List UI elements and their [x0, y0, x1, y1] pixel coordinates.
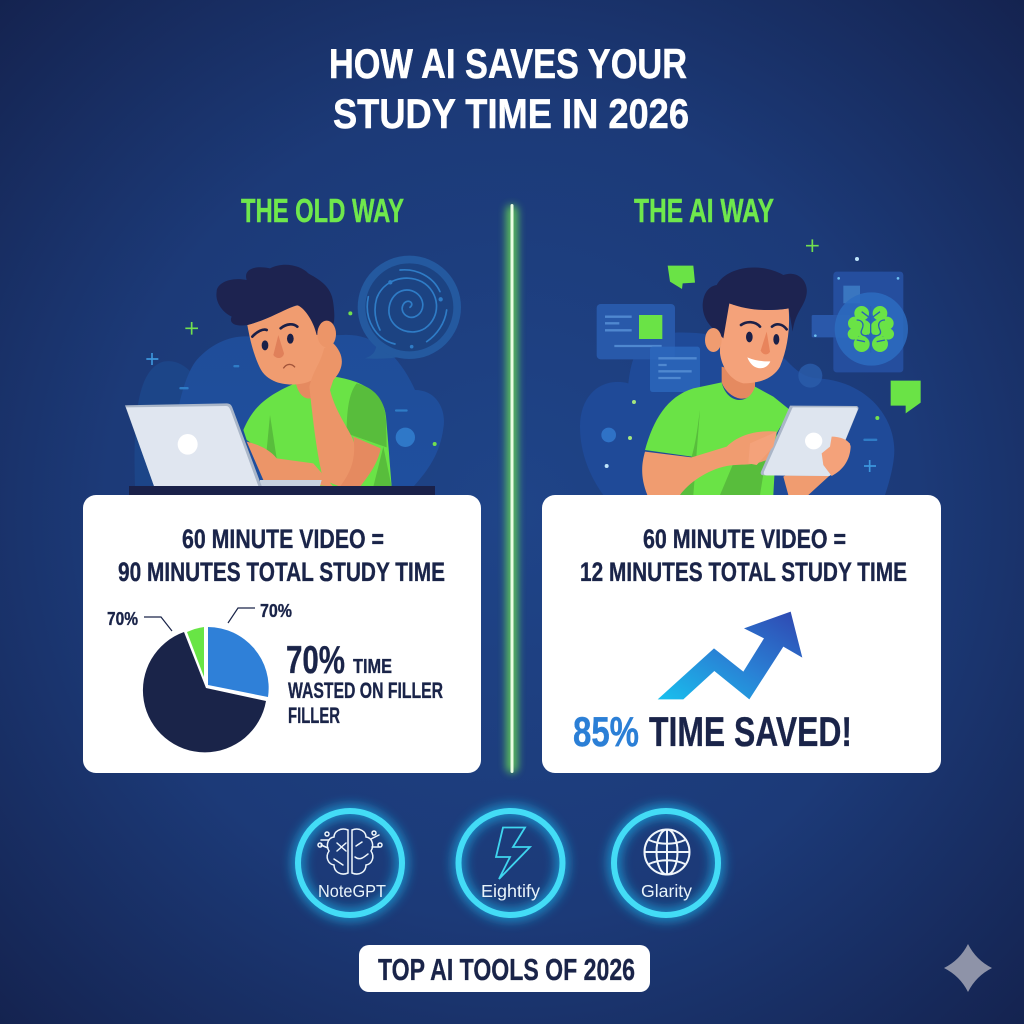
- tool: Eightify: Eightify: [481, 881, 540, 901]
- arm and pointing hand: [642, 431, 777, 495]
- t-shirt: [243, 377, 392, 487]
- panel: old way card: [83, 495, 481, 773]
- brain panel: [798, 272, 908, 388]
- card heading: 60 MINUTE VIDEO =: [643, 524, 846, 554]
- icon: sparkle watermark: [944, 944, 992, 992]
- icon: lightning bolt: [496, 828, 530, 879]
- illustration: old way student: [125, 256, 461, 495]
- title: STUDY TIME IN 2026: [333, 90, 689, 137]
- stat: 70 percent wasted: WASTED ON FILLER: [288, 678, 443, 703]
- sparkles: [146, 311, 437, 447]
- tool: Glarity: [614, 811, 718, 915]
- speech bubble right: [891, 381, 921, 413]
- stat: 70 percent wasted: 70%: [286, 639, 345, 682]
- title: HOW AI SAVES YOUR: [329, 40, 687, 87]
- speech bubble top: [668, 266, 695, 289]
- blob backdrop: [135, 335, 444, 487]
- spiral thought bubble: [358, 256, 461, 359]
- shirt shade: [680, 410, 767, 495]
- pie label left: [107, 609, 172, 631]
- sparkles: [601, 239, 879, 472]
- floating card one: [597, 304, 675, 359]
- badge: top AI tools: TOP AI TOOLS OF 2026: [378, 952, 635, 987]
- pie label right: 70%: [260, 601, 292, 621]
- icon: green brain: [848, 306, 894, 353]
- tool: NoteGPT: [298, 811, 402, 915]
- lower arm on desk: [247, 442, 333, 487]
- panel: AI way card: [542, 495, 941, 773]
- face details: [741, 322, 787, 368]
- forearm right: [783, 437, 850, 495]
- illustration: AI way student: [580, 239, 921, 495]
- heading: the AI way: THE AI WAY: [634, 192, 774, 229]
- face details: [252, 324, 297, 368]
- face: [720, 303, 789, 383]
- ear: [705, 328, 722, 352]
- face: [247, 305, 327, 384]
- icon: circuit brain: [318, 829, 382, 874]
- floating card two: [650, 347, 700, 392]
- badge: top AI tools: [359, 945, 650, 992]
- heading: the old way: THE OLD WAY: [241, 192, 404, 229]
- stat: 70 percent wasted: FILLER: [288, 703, 340, 728]
- stat: 85 percent saved: TIME SAVED!: [649, 708, 852, 755]
- icon: globe: [644, 830, 690, 874]
- title: [329, 40, 689, 137]
- t-shirt: [645, 382, 790, 495]
- pie chart: [143, 627, 269, 752]
- hair: [703, 267, 807, 338]
- hair: [216, 265, 334, 335]
- laptop: [125, 403, 322, 486]
- tool: Glarity: Glarity: [641, 881, 692, 901]
- arrow: rising trend: [658, 612, 802, 699]
- blob backdrop: [580, 332, 894, 495]
- card heading: [118, 524, 445, 587]
- card heading: 12 MINUTES TOTAL STUDY TIME: [580, 557, 907, 587]
- card heading: 60 MINUTE VIDEO =: [182, 524, 384, 554]
- stat: 85 percent saved: 85%: [573, 708, 639, 755]
- pointing fingers: [748, 432, 777, 465]
- pie label right: [228, 601, 292, 623]
- stat: 70 percent wasted: [286, 639, 443, 728]
- pie label left: 70%: [107, 609, 138, 629]
- propping hand and arm: [309, 343, 355, 487]
- tool: Eightify: [458, 811, 562, 915]
- card heading: 90 MINUTES TOTAL STUDY TIME: [118, 557, 445, 587]
- neck: [295, 377, 315, 399]
- desk: [129, 486, 435, 495]
- stat: 70 percent wasted: TIME: [353, 656, 392, 678]
- glowing divider: [506, 204, 518, 773]
- card heading: [580, 524, 907, 587]
- ear: [317, 321, 336, 347]
- tablet: [761, 406, 858, 476]
- stat: 85 percent saved: [573, 708, 852, 755]
- upper arm: [340, 437, 381, 487]
- shirt shade: [267, 383, 392, 487]
- tool: NoteGPT: NoteGPT: [318, 881, 386, 901]
- hand on tablet: [822, 437, 851, 476]
- neck: [722, 367, 755, 399]
